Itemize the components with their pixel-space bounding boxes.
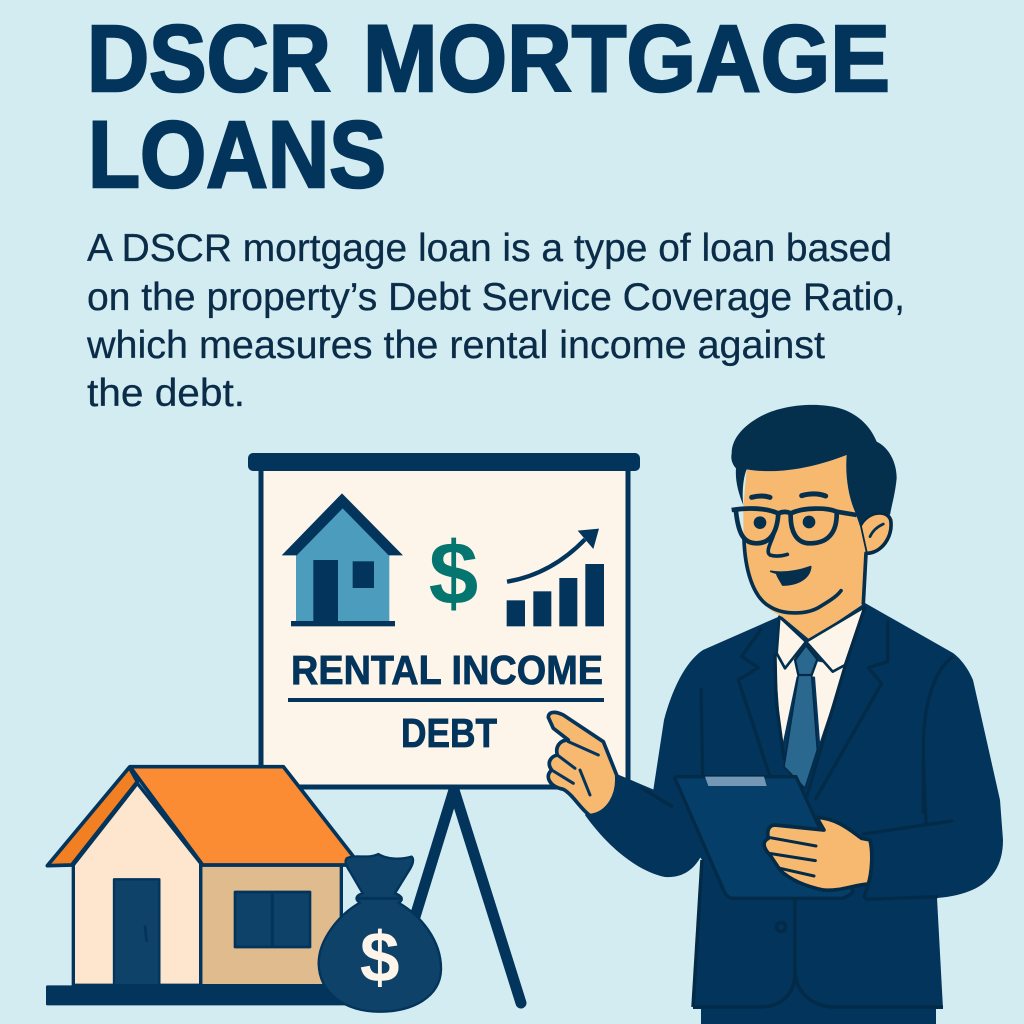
clipboard [675, 777, 853, 898]
hair [731, 405, 897, 526]
main roof [130, 767, 360, 865]
description text: the debt. [87, 372, 245, 415]
tie [784, 675, 817, 788]
left roof edge [47, 767, 137, 866]
tie knot [795, 645, 817, 675]
easel legs [414, 790, 521, 1003]
icon: rising bar chart [507, 529, 604, 626]
clipboard and hand [675, 760, 952, 899]
title: LOANS [88, 102, 386, 208]
front wall [73, 783, 201, 985]
title: MORTGAGE [363, 6, 890, 112]
house illustration [46, 767, 360, 1005]
money bag [319, 854, 441, 1012]
mouth [771, 567, 811, 585]
side wall [201, 865, 341, 986]
shirt, tie and lapels [701, 607, 953, 813]
title: DSCR [87, 6, 331, 112]
icon: dollar sign: $ [429, 523, 478, 623]
holding hand [764, 817, 872, 890]
door [114, 879, 159, 985]
jacket seam, hem and button [640, 787, 943, 1007]
face [743, 455, 866, 640]
eyebrows [752, 494, 826, 497]
ear detail [870, 524, 883, 537]
description text: which measures the rental income against [86, 324, 825, 367]
formula: rental income over debt: RENTAL INCOME [291, 647, 603, 693]
presentation board [248, 453, 640, 1003]
shirt [775, 653, 845, 748]
money bag: $ [360, 918, 399, 998]
pointing arm [585, 772, 704, 877]
title [87, 6, 890, 208]
description text: on the property’s Debt Service Coverage Ratio, [87, 276, 905, 319]
description text: A DSCR mortgage loan is a type of loan based [87, 227, 892, 270]
collar [777, 607, 865, 672]
sleeve lines [863, 760, 952, 899]
jacket [640, 603, 1003, 1009]
formula: rental income over debt: DEBT [401, 710, 497, 756]
trousers [701, 1005, 936, 1024]
formula: rental income over debt [288, 647, 604, 756]
board surface [261, 465, 628, 787]
pointing hand [548, 712, 617, 816]
jaw line [744, 540, 866, 613]
head [731, 405, 897, 640]
window [235, 892, 310, 947]
description text [86, 227, 905, 415]
eyes [754, 516, 815, 529]
glasses [732, 509, 857, 543]
nose [768, 533, 787, 556]
top rail [248, 453, 640, 471]
ground [46, 985, 353, 1005]
ear [860, 513, 891, 553]
lapels and sleeve lines [701, 607, 953, 813]
presenter [548, 405, 1003, 1024]
icon: house [282, 493, 403, 626]
